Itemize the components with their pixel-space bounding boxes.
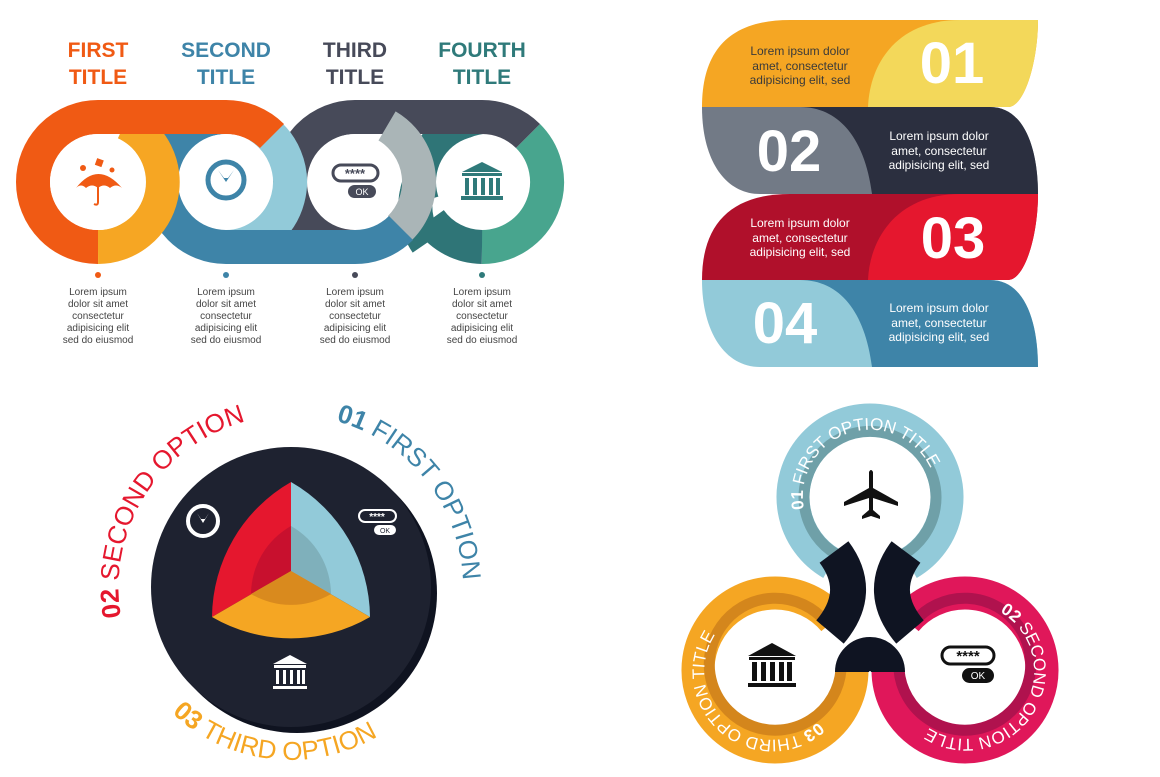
row 02: adipisicing elit, sed	[889, 158, 989, 172]
titles: TITLE	[453, 66, 511, 89]
descriptions: Lorem ipsum	[326, 287, 384, 298]
titles: TITLE	[326, 66, 384, 89]
icon: bank dark	[748, 643, 796, 687]
panel: numbered rows (top right)	[702, 20, 1038, 367]
titles: THIRD	[323, 39, 387, 62]
icon: clock	[208, 162, 244, 198]
descriptions: consectetur	[72, 311, 125, 322]
ring label: first option title: 01 FIRST OPTION TITLE	[791, 418, 940, 510]
curved label: second option: 02 SECOND OPTION	[100, 404, 244, 618]
icon: password white	[359, 510, 396, 535]
descriptions: consectetur	[200, 311, 253, 322]
reuleaux triangle segments	[212, 482, 370, 638]
descriptions: dolor sit amet	[68, 299, 128, 310]
descriptions: consectetur	[329, 311, 382, 322]
curved label: first option: 01 FIRST OPTION	[338, 405, 481, 578]
descriptions: sed do eiusmod	[447, 335, 517, 346]
panel: trefoil rings (bottom right)	[681, 404, 1059, 764]
row 01: amet, consectetur	[752, 59, 848, 73]
dark connectors	[830, 552, 848, 632]
titles: TITLE	[197, 66, 255, 89]
descriptions: adipisicing elit	[67, 323, 129, 334]
row 04: amet, consectetur	[891, 316, 987, 330]
row 03: Lorem ipsum dolor	[750, 216, 850, 230]
icon: password white: ****	[369, 512, 385, 523]
descriptions: consectetur	[456, 311, 509, 322]
panel: circle with reuleaux triangle (bottom left)	[100, 404, 481, 760]
descriptions: dolor sit amet	[452, 299, 512, 310]
titles: FIRST	[68, 39, 128, 62]
row 03: amet, consectetur	[752, 231, 848, 245]
icon: airplane	[844, 470, 898, 519]
row 02: 02	[757, 119, 821, 184]
icon: clock white	[188, 506, 218, 536]
descriptions: dolor sit amet	[325, 299, 385, 310]
titles: SECOND	[181, 39, 271, 62]
row 03: 03	[921, 206, 985, 271]
descriptions: adipisicing elit	[324, 323, 386, 334]
row 01	[702, 20, 1038, 107]
descriptions: Lorem ipsum	[453, 287, 511, 298]
icon: bank white	[273, 655, 307, 689]
icon: umbrella	[76, 158, 122, 205]
row 02	[702, 107, 1038, 194]
descriptions: sed do eiusmod	[320, 335, 390, 346]
row 03: adipisicing elit, sed	[750, 245, 850, 259]
row 04: Lorem ipsum dolor	[889, 301, 989, 315]
panel: chain process (top left)	[33, 39, 547, 346]
row 02: amet, consectetur	[891, 144, 987, 158]
icon: password ok	[333, 165, 378, 198]
row 01: 01	[920, 31, 984, 96]
descriptions: adipisicing elit	[195, 323, 257, 334]
row 02: Lorem ipsum dolor	[889, 129, 989, 143]
titles: TITLE	[69, 66, 127, 89]
row 01: Lorem ipsum dolor	[750, 44, 850, 58]
chain rings	[33, 117, 547, 247]
icon: password white: OK	[380, 528, 390, 535]
row 01: adipisicing elit, sed	[750, 73, 850, 87]
row 04	[702, 280, 1038, 367]
descriptions: sed do eiusmod	[63, 335, 133, 346]
icon: bank	[461, 162, 503, 200]
row 04: adipisicing elit, sed	[889, 330, 989, 344]
titles	[68, 39, 526, 89]
icon: password ok: OK	[355, 187, 369, 197]
row 03	[702, 194, 1038, 280]
row 04: 04	[753, 291, 817, 356]
descriptions: Lorem ipsum	[69, 287, 127, 298]
icon: password dark	[942, 647, 994, 683]
descriptions: sed do eiusmod	[191, 335, 261, 346]
icon: password dark: ****	[956, 648, 980, 665]
descriptions	[63, 272, 517, 346]
curved label: third option: 03 THIRD OPTION	[175, 702, 376, 760]
ring label: second option title: 02 SECOND OPTION TITLE	[924, 604, 1046, 751]
descriptions: adipisicing elit	[451, 323, 513, 334]
descriptions: dolor sit amet	[196, 299, 256, 310]
ring label: third option title: 03 THIRD OPTION TITLE	[692, 630, 824, 752]
icon: password ok: ****	[345, 166, 366, 181]
titles: FOURTH	[438, 39, 526, 62]
icon: password dark: OK	[971, 671, 986, 682]
descriptions: Lorem ipsum	[197, 287, 255, 298]
